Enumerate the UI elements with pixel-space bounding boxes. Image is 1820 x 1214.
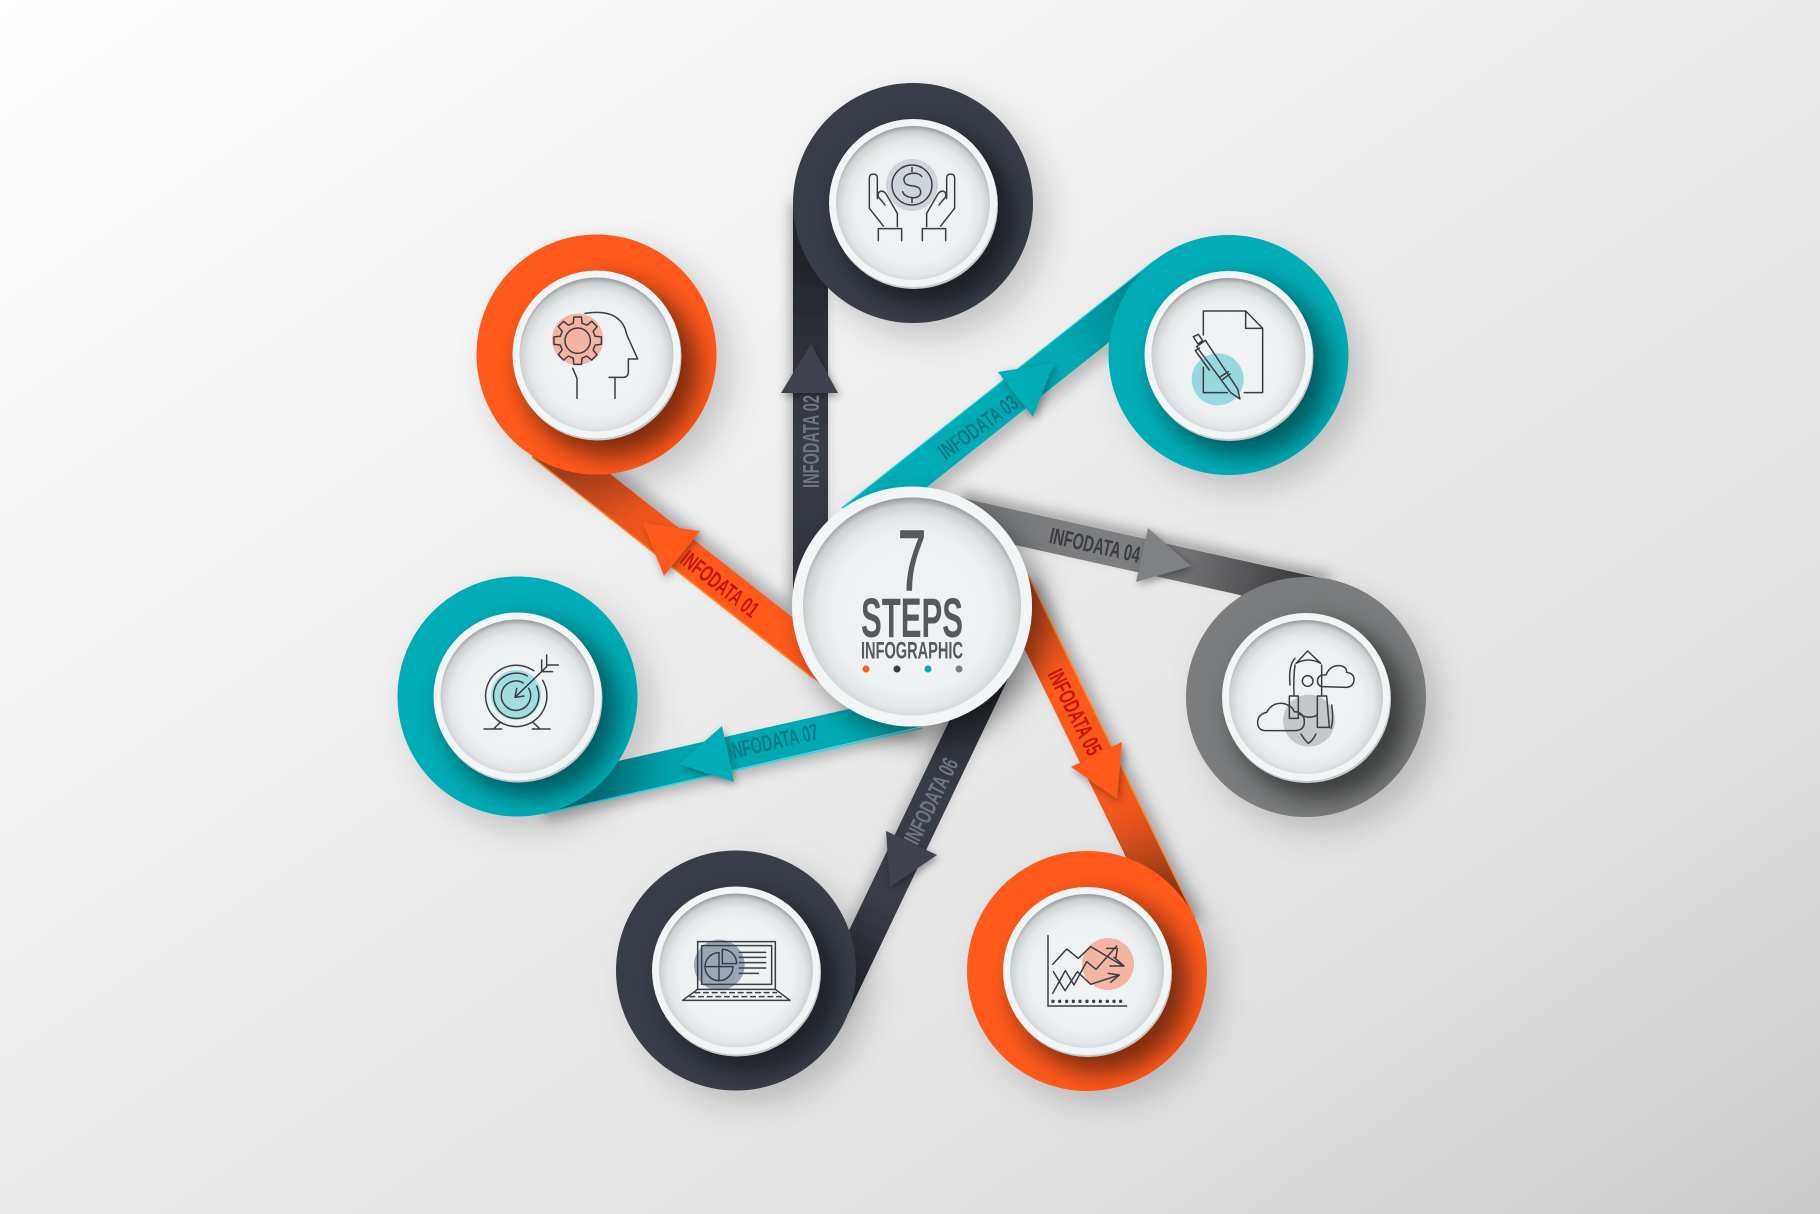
heading: 7: 7 — [898, 514, 926, 609]
icon: hands with dollar coin — [869, 159, 955, 241]
diagram: seven step radial infographic — [398, 83, 1452, 1117]
arrow: infodata 04 — [960, 497, 1332, 620]
arrow: infodata 06 — [812, 645, 1017, 1024]
icon: head with gear — [552, 312, 638, 398]
step disk: document and pen (teal) — [1108, 235, 1348, 475]
arrow: infodata 03: INFODATA 03 — [933, 389, 1023, 465]
step disk: laptop with pie chart (dark) — [616, 850, 856, 1090]
center disk: title — [792, 486, 1032, 726]
arrow: infodata 02 — [781, 203, 838, 606]
arrow: infodata 07 — [536, 702, 922, 814]
arrow: infodata 06: INFODATA 06 — [899, 754, 963, 848]
icon: laptop with pie chart — [683, 940, 790, 1000]
arrow: infodata 05: INFODATA 05 — [1043, 665, 1107, 760]
step disk: hands with coin (dark) — [793, 83, 1033, 323]
arrow: infodata 04: INFODATA 04 — [1047, 522, 1143, 568]
icon: rocket and clouds — [1258, 651, 1354, 747]
arrow: infodata 03 — [842, 261, 1154, 560]
arrow: infodata 01: INFODATA 01 — [676, 545, 764, 623]
step disk: chart with arrows (orange) — [967, 851, 1207, 1091]
step disk: target with arrow (teal) — [398, 576, 638, 816]
heading: steps: STEPS — [861, 586, 963, 649]
heading: infographic: INFOGRAPHIC — [861, 638, 963, 664]
arrow: infodata 02: INFODATA 02 — [798, 395, 824, 488]
color dots — [862, 666, 962, 672]
arrow: infodata 07: INFODATA 07 — [725, 718, 821, 765]
icon: document and pen — [1192, 311, 1263, 405]
step disk: rocket and clouds (gray) — [1186, 577, 1426, 817]
icon: target with arrow — [484, 655, 558, 729]
arrow: infodata 01 — [532, 430, 871, 707]
step disk: head with gear (orange) — [476, 234, 716, 474]
arrow: infodata 05 — [980, 575, 1195, 930]
icon: line chart with arrows — [1048, 936, 1134, 1006]
